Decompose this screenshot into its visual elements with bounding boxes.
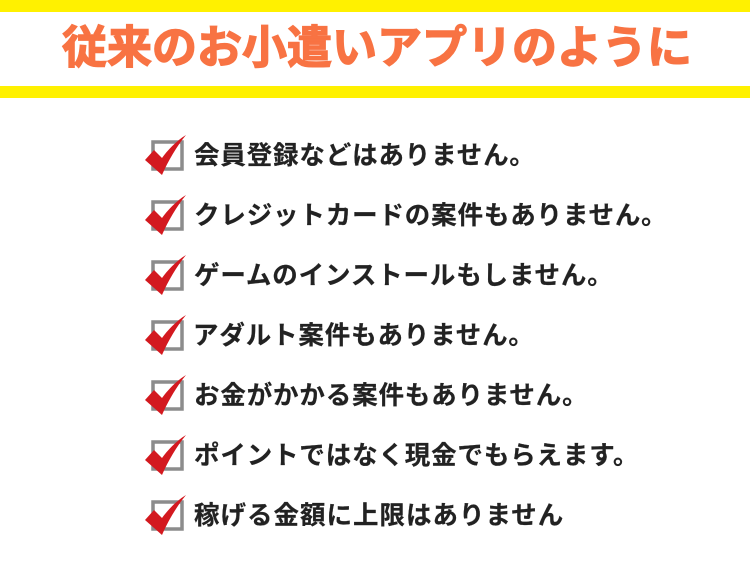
title: 従来のお小遣いアプリのように — [62, 22, 692, 73]
item text: クレジットカードの案件もありません。 — [194, 202, 668, 230]
list item 5 — [145, 375, 588, 415]
item text: ポイントではなく現金でもらえます。 — [194, 442, 639, 470]
item text: 稼げる金額に上限はありません — [194, 502, 564, 530]
top yellow band — [0, 0, 750, 12]
icon: check mark — [145, 255, 186, 295]
bottom yellow band — [0, 86, 750, 98]
list item 6 — [145, 435, 639, 475]
icon: check mark — [145, 435, 186, 475]
icon: check mark — [145, 195, 186, 235]
item text: お金がかかる案件もありません。 — [194, 382, 588, 410]
list item 4 — [145, 315, 535, 355]
item text: ゲームのインストールもしません。 — [194, 262, 614, 290]
item text: 会員登録などはありません。 — [194, 142, 536, 170]
list item 1 — [145, 135, 536, 175]
list item 2 — [145, 195, 668, 235]
icon: check mark — [145, 135, 186, 175]
icon: check mark — [145, 315, 186, 355]
icon: check mark — [145, 375, 186, 415]
list item 7 — [145, 495, 564, 535]
icon: check mark — [145, 495, 186, 535]
item text: アダルト案件もありません。 — [193, 322, 535, 350]
list item 3 — [145, 255, 614, 295]
